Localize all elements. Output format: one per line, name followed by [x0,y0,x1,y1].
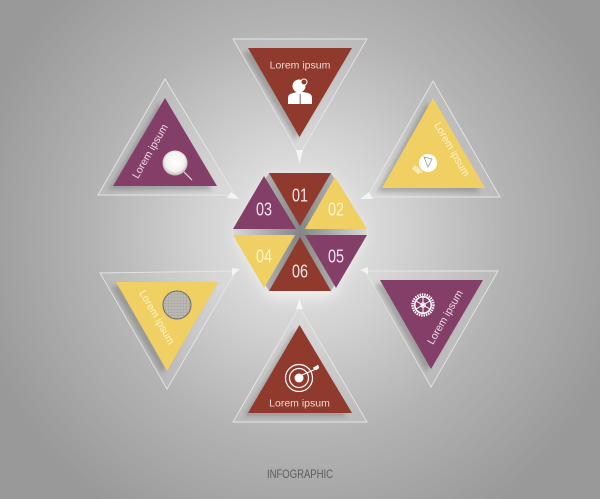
segment 04: 04 [256,246,272,266]
shadow [243,52,346,140]
label: Lorem ipsum [130,122,171,181]
panel: right bottom triangle [360,267,498,387]
triangle [113,98,217,186]
shadow [108,102,212,190]
icon: person [288,79,312,104]
label: Lorem ipsum [425,288,466,347]
segment 01: 01 [292,186,308,206]
segment 03: 03 [256,200,272,220]
outline arrow [360,267,498,387]
panel: right top triangle [360,81,500,199]
panel: top triangle [233,39,367,164]
shadow [243,329,347,417]
triangle [248,325,352,413]
shadow [111,286,213,374]
triangle [380,280,483,369]
hexagon base [233,173,367,291]
label: Lorem ipsum [136,288,177,347]
panel: bottom triangle [233,299,367,422]
icon: target [286,364,319,392]
label: Lorem ipsum [270,60,331,72]
segment 02: 02 [328,200,344,220]
outline arrow [233,39,367,164]
label: Lorem ipsum [269,398,330,410]
shadow [375,284,478,372]
shadow [377,102,480,192]
outline arrow [360,81,500,199]
label: Lorem ipsum [431,120,472,179]
icon: globe [163,291,191,319]
icon: gear [412,294,434,316]
outline arrow [98,79,240,199]
panel: left bottom triangle [100,268,240,389]
footer title: INFOGRAPHIC [267,467,333,481]
icon: magnifier [162,150,192,180]
segment 06: 06 [292,262,308,282]
icon: light bulb [412,154,437,174]
outline arrow [100,268,240,389]
triangle [382,98,485,188]
hexagon glow [234,176,366,298]
triangle [248,48,352,137]
panel: left top triangle [98,79,240,199]
segment 05: 05 [328,246,344,266]
triangle [116,282,218,371]
outline arrow [233,299,367,422]
panel: central hexagon [233,173,367,298]
